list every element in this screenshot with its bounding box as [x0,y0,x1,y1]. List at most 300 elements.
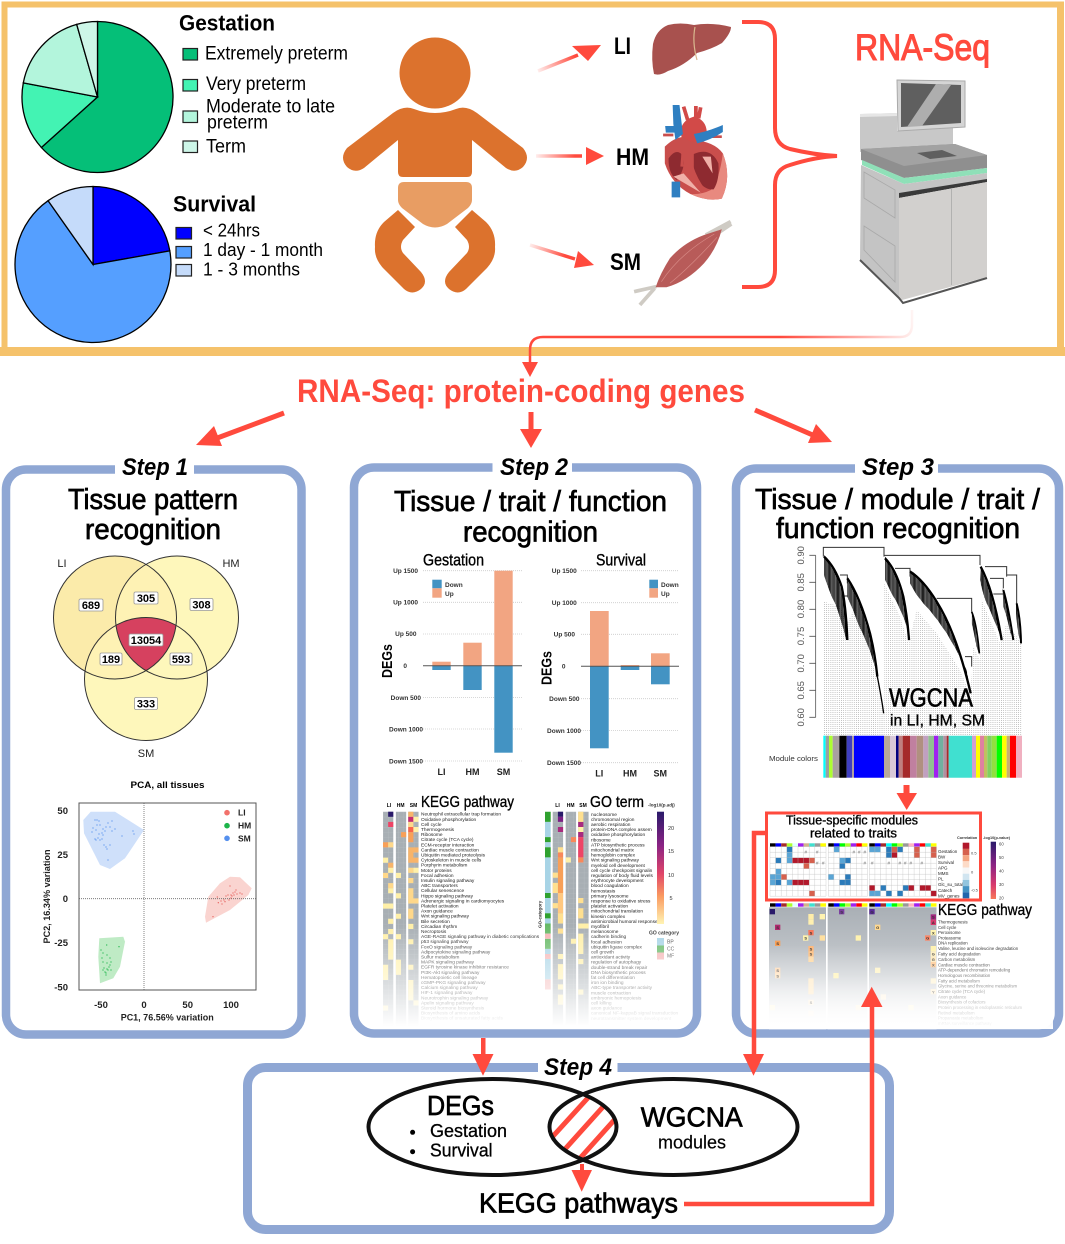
legend: gestation: Term [206,137,246,158]
heatmap: module trait relationships: Glc_su_total [938,882,963,887]
heatmap: module KEGG pathway: S [810,1000,813,1005]
bar chart: gestation DEGs: Up 1500 [393,568,418,575]
heatmap: module trait relationships: ## [804,850,819,854]
heatmap: GO term: platelet activation [591,904,628,910]
heatmap: GO term: fat cell differentiation [591,975,635,981]
legend: survival: 1 day - 1 month [203,240,323,260]
PCA scatter plot: LI [238,808,246,818]
arrow: to step 3 [755,410,832,443]
bar chart: gestation DEGs: HM [466,767,480,777]
heatmap: KEGG pathway: cGMP-PKG signaling pathway [421,980,486,986]
icon: muscle [634,222,731,305]
heatmap: GO term: GO category [649,930,679,936]
heading: KEGG pathways: KEGG pathways [479,1188,678,1219]
legend: survival [173,192,323,279]
legend: gestation: Very preterm [206,74,306,95]
heatmap: KEGG pathway: Neurotrophin signaling pathway [421,995,489,1001]
module colors bar [769,736,1022,778]
heatmap: KEGG pathway: Hematopoietic cell lineage [421,975,477,981]
heatmap: module KEGG pathway: G [926,936,929,941]
heatmap: KEGG pathway: HIF-1 signaling pathway [421,990,473,996]
label: HM: HM [616,144,649,171]
icon: heart [663,105,727,200]
heatmap: GO term: melanosome [591,929,619,935]
legend: gestation: Moderate to late [206,97,335,118]
PCA scatter plot: 25 [57,850,69,861]
heatmap: module KEGG pathway: S [932,915,935,920]
heatmap: module KEGG pathway: X [932,930,935,935]
panel: step 1 tissue pattern recognition [6,454,302,1034]
heatmap: GO term: 20 [668,826,674,832]
venn diagram: 308 [192,600,211,612]
heatmap: module KEGG pathway: Citrate cycle (TCA cycle) [938,989,986,994]
bracket: tissues to RNA-Seq [742,22,837,287]
heatmap: module trait relationships: ## [816,860,825,866]
bar chart: gestation DEGs: 0 [403,663,407,670]
step 1 label: Step 1 [122,454,188,481]
panel: study cohort and RNA-Seq frame [0,2,1065,356]
heatmap: module KEGG pathway: Thermogenesis [938,920,968,924]
heatmap: module KEGG pathway: Homologous recombination [938,973,991,978]
heatmap: module KEGG pathway: Cell cycle [938,925,957,930]
heatmap: GO term: aerobic respiration [591,822,631,828]
heatmap: GO term: LI [555,803,560,809]
heatmap: module KEGG pathway: Peroxisome [938,930,961,935]
PCA scatter plot: 100 [223,1000,239,1011]
heatmap: module trait relationships: 60 [999,842,1004,846]
heatmap: module KEGG pathway: Propanoate metabolism [938,1016,984,1021]
heatmap: module KEGG pathway: Axon guidance [938,994,967,1000]
label: WGCNA: in LI, HM, SM [890,713,985,730]
heatmap: GO term: focal adhesion [591,939,622,945]
bar chart: gestation DEGs: Up 500 [395,631,417,638]
arrow: baby to liver [538,45,601,71]
heatmap: module KEGG pathway: S [810,946,813,951]
bar chart: survival DEGs: Down 1000 [547,728,581,735]
venn diagram [54,556,240,760]
bar chart: survival DEGs: 0 [562,664,566,670]
heatmap: KEGG pathway: Thermogenesis [421,827,455,833]
bar chart: gestation DEGs: Up 1000 [393,600,418,606]
heatmap: module trait relationships: MMS [938,871,948,876]
heatmap: module trait relationships: Survival [938,860,954,865]
bar chart: gestation DEGs [379,552,522,777]
bar chart: survival DEGs [538,552,679,779]
legend: survival: < 24hrs [203,221,260,241]
heatmap: GO term: hemoglobin complex [591,853,636,859]
heatmap: GO term: BP [667,940,674,946]
heatmap: GO term: GO-category [538,900,542,928]
heatmap: module trait relationships: 0 [971,870,974,874]
arrow: to step 1 [196,413,284,446]
legend: gestation: Gestation [179,11,275,36]
heatmap: module KEGG pathway: KEGG pathway [938,902,1032,919]
heatmap: GO term: cadherin binding [591,934,627,940]
bar chart: gestation DEGs: LI [438,767,446,777]
heatmap: module trait relationships: MV_genes [938,894,960,898]
heatmap: GO term: ATP biosynthetic process [591,842,645,848]
pie chart: gestation [22,21,173,173]
heatmap: module KEGG pathway: Biosynthesis of cofactors [938,1000,986,1005]
heatmap: KEGG pathway: Citrate cycle (TCA cycle) [421,837,474,843]
arrow: overlap to KEGG pathways [572,1164,592,1192]
venn diagram: 689 [82,600,100,612]
heatmap: module KEGG pathway: S [776,925,779,930]
pie chart: survival [15,186,171,342]
heatmap: GO term: primary lysosome [591,893,629,899]
heatmap: GO term: chromosomal region [591,817,635,823]
chart: WGCNA dendrogram [796,546,1022,736]
bar chart: survival DEGs: Up 1000 [552,600,577,607]
heatmap: GO term: kinesin complex [591,914,626,920]
heatmap: KEGG pathway: Oxidative phosphorylation [421,817,477,823]
bar chart: survival DEGs: Up 1500 [552,568,577,575]
heatmap: module trait relationships: 40 [999,868,1004,874]
heatmap: module KEGG pathway: A [932,920,935,925]
heatmap: module KEGG pathway: S [810,930,813,935]
heatmap: KEGG pathway: FoxO signaling pathway [421,944,473,950]
venn ellipses: DEGs and WGCNA overlap [366,1077,800,1177]
heatmap: KEGG pathway: PI3K-Akt signaling pathway [421,970,480,976]
module colors bar: Module colors [769,754,818,763]
heatmap: module KEGG pathway: S [776,968,779,973]
heatmap: module KEGG pathway: Fatty acid degradation [938,952,981,957]
heading: RNA-Seq protein-coding genes: RNA-Seq: protein-coding genes [297,373,745,409]
heatmap: GO term: neurotransmitter system development [591,1016,672,1022]
heading: step 2 [394,486,667,548]
heatmap: GO term: 15 [668,849,674,855]
heatmap: module KEGG pathway: S [804,936,807,941]
PCA scatter plot: 0 [63,894,68,905]
PCA scatter plot: PCA, all tissues [130,780,204,791]
heatmap: GO term: canonical NF-kappaB signal transduction [591,1011,679,1017]
chart: WGCNA dendrogram: 0.90 [796,546,807,565]
heatmap: GO term: protein-DNA complex assem [591,827,652,833]
heatmap: module KEGG pathway: Proteasome [938,935,962,940]
heatmap: module trait relationships: 20 [999,896,1004,900]
heading: step 1: recognition [85,514,221,546]
heatmap: KEGG pathway: ECM-receptor interaction [421,842,475,848]
PCA scatter plot: 0 [141,1000,147,1011]
heatmap: module trait relationships: -log10(p-value) [983,836,1011,840]
chart: WGCNA dendrogram: 0.80 [796,600,807,618]
heatmap: KEGG pathway: p53 signaling pathway [421,939,469,945]
heatmap: GO term: GO term [590,794,644,811]
heatmap: GO term: oxidative phosphorylation [591,832,645,838]
bar chart: survival DEGs: Down 1500 [547,760,581,767]
heatmap: module trait relationships: 30 [999,882,1004,887]
heatmap: GO term: embryonic hemopoiesis [591,995,642,1001]
heatmap: KEGG pathway: Apelin signaling pathway [421,1000,474,1006]
PCA scatter plot: -50 [94,1000,108,1011]
heatmap: GO term: 5 [670,896,673,902]
heading: step 2: Tissue / trait / function [394,486,667,518]
venn diagram: 593 [172,654,190,666]
heatmap: KEGG pathway: EGFR tyrosine kinase inhibitor resistance [421,965,509,971]
heatmap: KEGG pathway: Focal adhesion [421,873,454,879]
heatmap: KEGG pathway: Calcium signaling pathway [421,985,478,991]
heatmap: module KEGG pathway: Carbon metabolism [938,957,976,962]
heatmap: module trait relationships: -0.5 [971,888,979,892]
heatmap: GO term: SM [579,803,587,809]
bar chart: gestation DEGs: Down 1500 [389,758,423,766]
bar chart: survival DEGs: SM [654,769,667,779]
heatmap: module KEGG pathway: G [876,925,879,930]
heatmap: module KEGG pathway: DNA replication [938,941,968,946]
arrow: step 2 to step 4 [472,1038,494,1076]
heatmap: module KEGG pathway: G [870,909,874,914]
heatmap: module trait relationships [770,836,1011,900]
heatmap: KEGG pathway: Cellular senescence [421,888,465,894]
heatmap: KEGG pathway: Axon guidance [421,909,453,915]
heatmap: GO term: ABC-type transporter activity [591,985,653,991]
bar chart: survival DEGs: Up [661,591,670,598]
arrow: KEGG pathways back to step 3 heatmap [684,987,882,1204]
PCA scatter plot: SM [238,833,251,843]
bar chart: gestation DEGs: SM [497,767,510,777]
bar chart: survival DEGs: Down [661,582,679,589]
heatmap: GO term: hemostasis [591,888,616,894]
heatmap: GO term: erythrocyte development [591,878,644,884]
heatmap: KEGG pathway: Insulin signaling pathway [421,878,475,884]
chart: WGCNA dendrogram: 0.75 [796,627,807,645]
heatmap: KEGG pathway: Hippo signaling pathway [421,893,474,899]
heatmap: module KEGG pathway: Fatty acid metabolism [938,978,980,983]
heatmap: KEGG pathway [383,794,540,1026]
venn diagram: 13054 [131,635,162,647]
PCA scatter plot [42,780,256,1024]
PCA scatter plot: PC1, 76.56% variation [121,1013,214,1024]
heatmap: GO term: mitochondrial matrix [591,848,635,854]
heatmap: module trait relationships: BW [938,854,946,860]
heading: step 3: Tissue / module / trait / [755,484,1041,516]
heatmap: module trait relationships: Catech [938,888,953,893]
venn diagram: SM [138,748,154,760]
arrow: baby to muscle [530,245,594,268]
heatmap: module trait relationships: 0.5 [971,850,977,856]
heatmap: module KEGG pathway: S [840,909,843,914]
bar chart: gestation DEGs: Down 1000 [389,726,423,734]
step 3 label: Step 3 [862,454,935,481]
heatmap: module KEGG pathway: S [776,973,779,978]
venn diagram: 189 [102,654,120,666]
heatmap: KEGG pathway: AGE-RAGE signaling pathway in diabetic complications [421,934,540,940]
heatmap: GO term: CC [667,946,675,952]
text: WGCNA modules: modules [658,1133,726,1153]
heatmap: GO term: regulation of body fluid levels [591,873,653,879]
heatmap: KEGG pathway: Sulfur metabolism [421,954,459,960]
arrow: RNA-Seq machine to gene set [522,310,912,377]
heatmap: module KEGG pathway: X [932,962,935,967]
heatmap: KEGG pathway: Biosynthesis of amino acids [421,1011,481,1017]
venn diagram: LI [57,558,67,570]
heatmap: GO term: 10 [668,873,674,879]
heatmap: module KEGG pathway: Retinol metabolism [938,1010,975,1015]
heatmap: GO term: ubiquitin ligase complex [591,944,643,950]
bar chart: survival DEGs: DEGs [538,651,556,685]
heatmap: module KEGG pathway: S [776,941,779,946]
arrow: dendrogram to modules [896,785,917,810]
heatmap: GO term: blood coagulation [591,883,629,889]
heatmap: KEGG pathway: Neutrophil extracellular trap formation [421,812,501,818]
bar chart: gestation DEGs: Down 500 [391,695,421,702]
heatmap: GO term: myeloid cell development [591,863,646,869]
heatmap: module trait relationships: PL [938,876,944,882]
step 2 label: Step 2 [500,454,569,481]
heatmap: GO term: muscle contraction [591,990,631,996]
heatmap: KEGG pathway: KEGG pathway [421,794,514,811]
icon: baby [343,38,527,292]
PCA scatter plot: 50 [57,806,68,817]
heatmap: module KEGG pathway: G [932,952,935,957]
arrow: step 3 modules to step 4 [743,833,765,1076]
title: RNA-Seq: RNA-Seq [855,27,990,68]
chart: WGCNA dendrogram: 0.65 [796,681,807,700]
heading: step 1 [68,484,238,546]
callout: tissue-specific modules box: Tissue-specific modules [786,813,918,827]
legend: survival: 1 - 3 months [203,259,300,279]
chart: WGCNA dendrogram: 0.70 [796,654,807,673]
heatmap: module KEGG pathway: Cardiac muscle contraction [938,962,990,967]
icon: liver [652,24,731,75]
heatmap: module trait relationships: Correlation [957,836,978,840]
text: WGCNA modules [641,1102,743,1153]
bar chart: survival DEGs: LI [595,769,603,779]
heatmap: KEGG pathway: Adrenergic signaling in cardiomyocytes [421,898,505,904]
bar chart: survival DEGs: HM [623,769,637,779]
heatmap: KEGG pathway: LI [387,803,392,809]
heatmap: KEGG pathway: HM [397,803,405,809]
heatmap: KEGG pathway: Adipocytokine signaling pathway [421,949,491,955]
heatmap: GO term: Wnt signaling pathway [591,858,640,864]
callout: tissue-specific modules box [766,813,980,900]
heatmap: GO term: HM [567,803,575,809]
heading: step 3 [755,484,1041,545]
step 4 label: Step 4 [544,1054,612,1081]
heatmap: KEGG pathway: Motor proteins [421,868,452,874]
PCA scatter plot: -50 [54,982,68,994]
heading: step 1: Tissue pattern [68,484,238,516]
heatmap: GO term: axon guidance [591,1006,623,1012]
PCA scatter plot: PC2, 16.34% variation [42,849,53,944]
heatmap: module KEGG pathway: Y [932,989,935,994]
heatmap: GO term: cell cycle checkpoint signalin [591,868,653,874]
bar chart: gestation DEGs: Down [445,582,463,589]
text: DEGs: Gestation [430,1121,507,1141]
heatmap: GO term: response to oxidative stress [591,898,651,904]
heatmap: module KEGG pathway: Glycine, serine and threonine metabolism [938,984,1017,989]
PCA scatter plot: -25 [54,938,69,949]
legend: survival: Survival [173,192,256,217]
label: WGCNA [889,683,985,730]
heatmap: GO term [538,794,679,1025]
heatmap: GO term: cell killing [591,1000,612,1006]
label: WGCNA: WGCNA [889,683,974,713]
heatmap: KEGG pathway: Cardiac muscle contraction [421,847,479,853]
text: DEGs: DEGs [427,1090,494,1121]
heatmap: module KEGG pathway: G [932,957,935,962]
icon: sequencing machine [860,80,987,303]
venn diagram: 305 [137,593,155,605]
heatmap: KEGG pathway: Necroptosis [421,929,447,935]
heatmap: KEGG pathway: Cytoskeleton in muscle cells [421,858,482,864]
text: DEGs: Survival [430,1141,492,1161]
heatmap: GO term: nucleosome [591,812,617,818]
legend: gestation [179,11,348,158]
venn diagram: HM [222,558,240,570]
bar chart: gestation DEGs: Gestation [423,552,484,570]
PCA scatter plot: HM [238,821,251,831]
heatmap: GO term: antimicrobial humoral response [591,919,658,925]
arrow: to step 2 [520,412,542,448]
heatmap: module trait relationships: 50 [999,855,1004,860]
heatmap: module KEGG pathway: ATP-dependent chromatin remodeling [938,968,1011,973]
legend: gestation: preterm [207,112,268,133]
panel: step 4 integration [248,1054,890,1230]
heatmap: module trait relationships: ###### [871,860,924,866]
legend: gestation: Extremely preterm [205,43,348,64]
chart: WGCNA dendrogram: 0.60 [796,708,807,727]
heatmap: module KEGG pathway: mRNA surveillance pathway [938,1021,992,1026]
heatmap: GO term: mitochondrial translation [591,909,643,915]
panel: step 2 tissue trait function recognition [354,454,697,1034]
heatmap: KEGG pathway: Platelet activation [421,904,459,910]
bar chart: survival DEGs: Down 500 [549,696,580,703]
heatmap: module KEGG pathway [768,902,1053,1029]
heatmap: GO term: MF [667,954,674,960]
heatmap: GO term: DNA biosynthetic process [591,970,646,976]
label: SM: SM [610,249,641,276]
chart: WGCNA dendrogram: 0.85 [796,573,807,592]
heading: step 2: recognition [463,516,598,548]
bar chart: gestation DEGs: DEGs [379,644,396,678]
heatmap: GO term: double-strand break repair [591,965,648,971]
heatmap: module KEGG pathway: Valine, leucine and isoleucine degradation [938,946,1019,951]
heatmap: KEGG pathway: ABC transporters [421,883,458,889]
heatmap: module trait relationships: # [864,860,866,866]
heatmap: GO term: regulation of autophagy [591,960,642,966]
venn diagram: 333 [137,698,155,710]
heatmap: KEGG pathway: Steroid hormone biosynthesis [421,1006,485,1012]
heatmap: GO term: myofibril [591,924,609,930]
callout: tissue-specific modules box: related to traits [810,826,897,840]
label: LI: LI [614,33,631,60]
heading: step 3: function recognition [776,513,1020,545]
heatmap: GO term: cell growth [591,950,614,956]
arrow: baby to heart [536,147,604,165]
heatmap: KEGG pathway: Ribosome [421,832,443,838]
bar chart: survival DEGs: Survival [596,552,646,570]
bar chart: gestation DEGs: Up [445,591,454,598]
text: WGCNA modules: WGCNA [641,1102,743,1133]
heatmap: KEGG pathway: SM [410,803,417,809]
heatmap: KEGG pathway: Bile secretion [421,919,450,925]
heatmap: KEGG pathway: Porphyrin metabolism [421,863,467,869]
text: DEGs [410,1090,507,1161]
heatmap: KEGG pathway: Ubiquitin mediated proteolysis [421,852,486,858]
heatmap: KEGG pathway: Wnt signaling pathway [421,914,470,920]
heatmap: module KEGG pathway: Protein processing in endoplasmic reticulum [938,1005,1022,1010]
heatmap: module trait relationships: APG [938,866,948,870]
heatmap: module KEGG pathway: S [810,952,813,957]
heatmap: GO term: -log10(p.adj) [648,802,675,808]
heatmap: GO term: antioxidant activity [591,955,631,961]
heatmap: KEGG pathway: Circadian rhythm [421,924,457,930]
PCA scatter plot: 50 [182,1000,193,1011]
panel: step 3 tissue module trait function recognition [736,454,1059,1034]
heatmap: GO term: iron ion binding [591,980,624,986]
heatmap: KEGG pathway: Biosynthesis of unsaturated fatty acids [421,1016,503,1022]
